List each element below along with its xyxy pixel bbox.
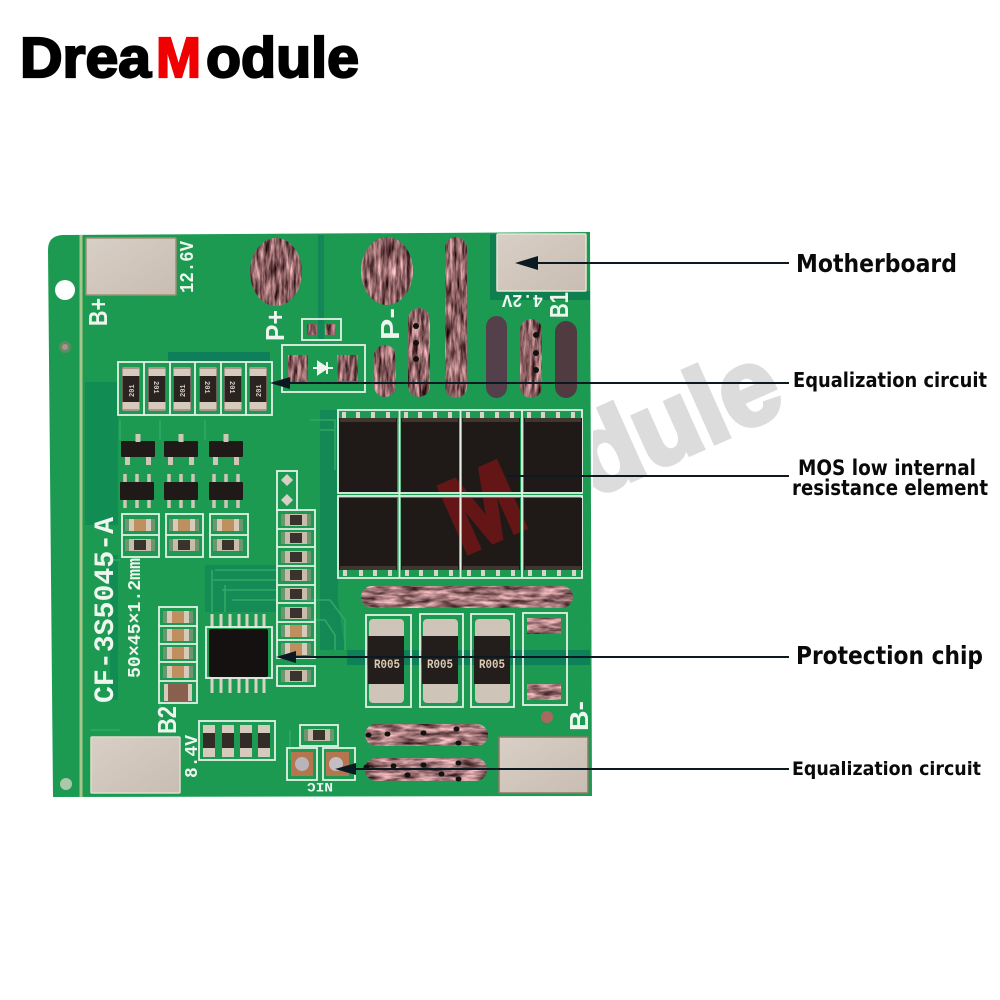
SOT transistors [120, 434, 243, 508]
arrow: equalization circuit bottom [335, 763, 789, 775]
current shunt resistors: R005 [427, 657, 453, 672]
arrow: equalization circuit top [270, 377, 789, 389]
equalization resistor row [118, 362, 272, 415]
empty shunt footprint [523, 613, 567, 723]
bottom copper bars [365, 724, 488, 781]
logo: DreaModule: M [156, 26, 201, 90]
label: MOS low internal resistance element: MOS low internal [798, 456, 976, 480]
logo: DreaModule: Drea [20, 26, 152, 90]
solder pad: B2 [91, 737, 180, 793]
diode footprint [282, 345, 365, 392]
MOSFET array [338, 410, 582, 578]
silkscreen labels: B1 [544, 292, 574, 318]
vertical component column [277, 471, 315, 686]
copper slots [374, 237, 577, 398]
copper oval P+ [250, 238, 302, 306]
label: Equalization circuit bottom: Equalization circuit [792, 758, 981, 780]
silkscreen labels: B+ [83, 298, 113, 326]
left capacitor column [159, 607, 197, 703]
panel: circuit board [48, 232, 594, 797]
capacitor and resistor trio [122, 514, 248, 557]
logo: DreaModule: odule [206, 26, 359, 90]
label: Motherboard: Motherboard [796, 249, 957, 278]
silkscreen labels: CF-3S5045-A [91, 517, 122, 703]
equalization resistor row: 201 [227, 381, 235, 394]
watermark letter M, visible only on the chips: M [425, 440, 540, 576]
solder pad: B- [499, 737, 588, 793]
silkscreen labels: P- [375, 308, 405, 340]
watermark letters odule, visible only off the board: odule [494, 321, 798, 544]
solder pad: B1 [497, 234, 586, 291]
long copper pad [361, 586, 573, 608]
silkscreen labels: P+ [260, 310, 290, 341]
silkscreen labels [83, 240, 594, 794]
logo: DreaModule [20, 26, 359, 90]
equalization resistor row: 201 [256, 384, 264, 397]
arrow: protection chip [276, 651, 789, 663]
silkscreen labels: B2 [152, 706, 182, 734]
solder pad: B+ [86, 238, 176, 295]
current shunt resistors: R005 [374, 657, 400, 672]
silkscreen labels: 4.2V [502, 289, 543, 309]
silkscreen labels: NIC [307, 779, 333, 794]
label: MOS low internal resistance element [792, 456, 988, 500]
copper oval P- [361, 237, 413, 305]
equalization resistor row: 201 [129, 384, 137, 397]
left edge strip [55, 235, 82, 797]
equalization resistor row: 201 [180, 384, 188, 397]
silkscreen labels: 8.4V [183, 735, 203, 778]
arrow: motherboard [515, 256, 789, 270]
current shunt resistors [366, 614, 514, 707]
small resistor footprint [302, 319, 341, 340]
arrow: MOS [508, 475, 789, 477]
equalization resistor row: 201 [151, 381, 159, 394]
silkscreen labels: 50×45×1.2mm [126, 558, 146, 678]
board substrate [48, 232, 592, 797]
watermark: Module [436, 362, 781, 556]
dark copper zones and traces [85, 234, 590, 760]
NIC resistor and pads [287, 725, 355, 780]
equalization resistor row: 201 [202, 381, 210, 394]
protection chip [206, 614, 272, 693]
current shunt resistors: R005 [479, 657, 505, 672]
bottom resistor row [199, 721, 275, 760]
silkscreen labels: B- [564, 701, 594, 731]
silkscreen labels: 12.6V [177, 240, 199, 293]
